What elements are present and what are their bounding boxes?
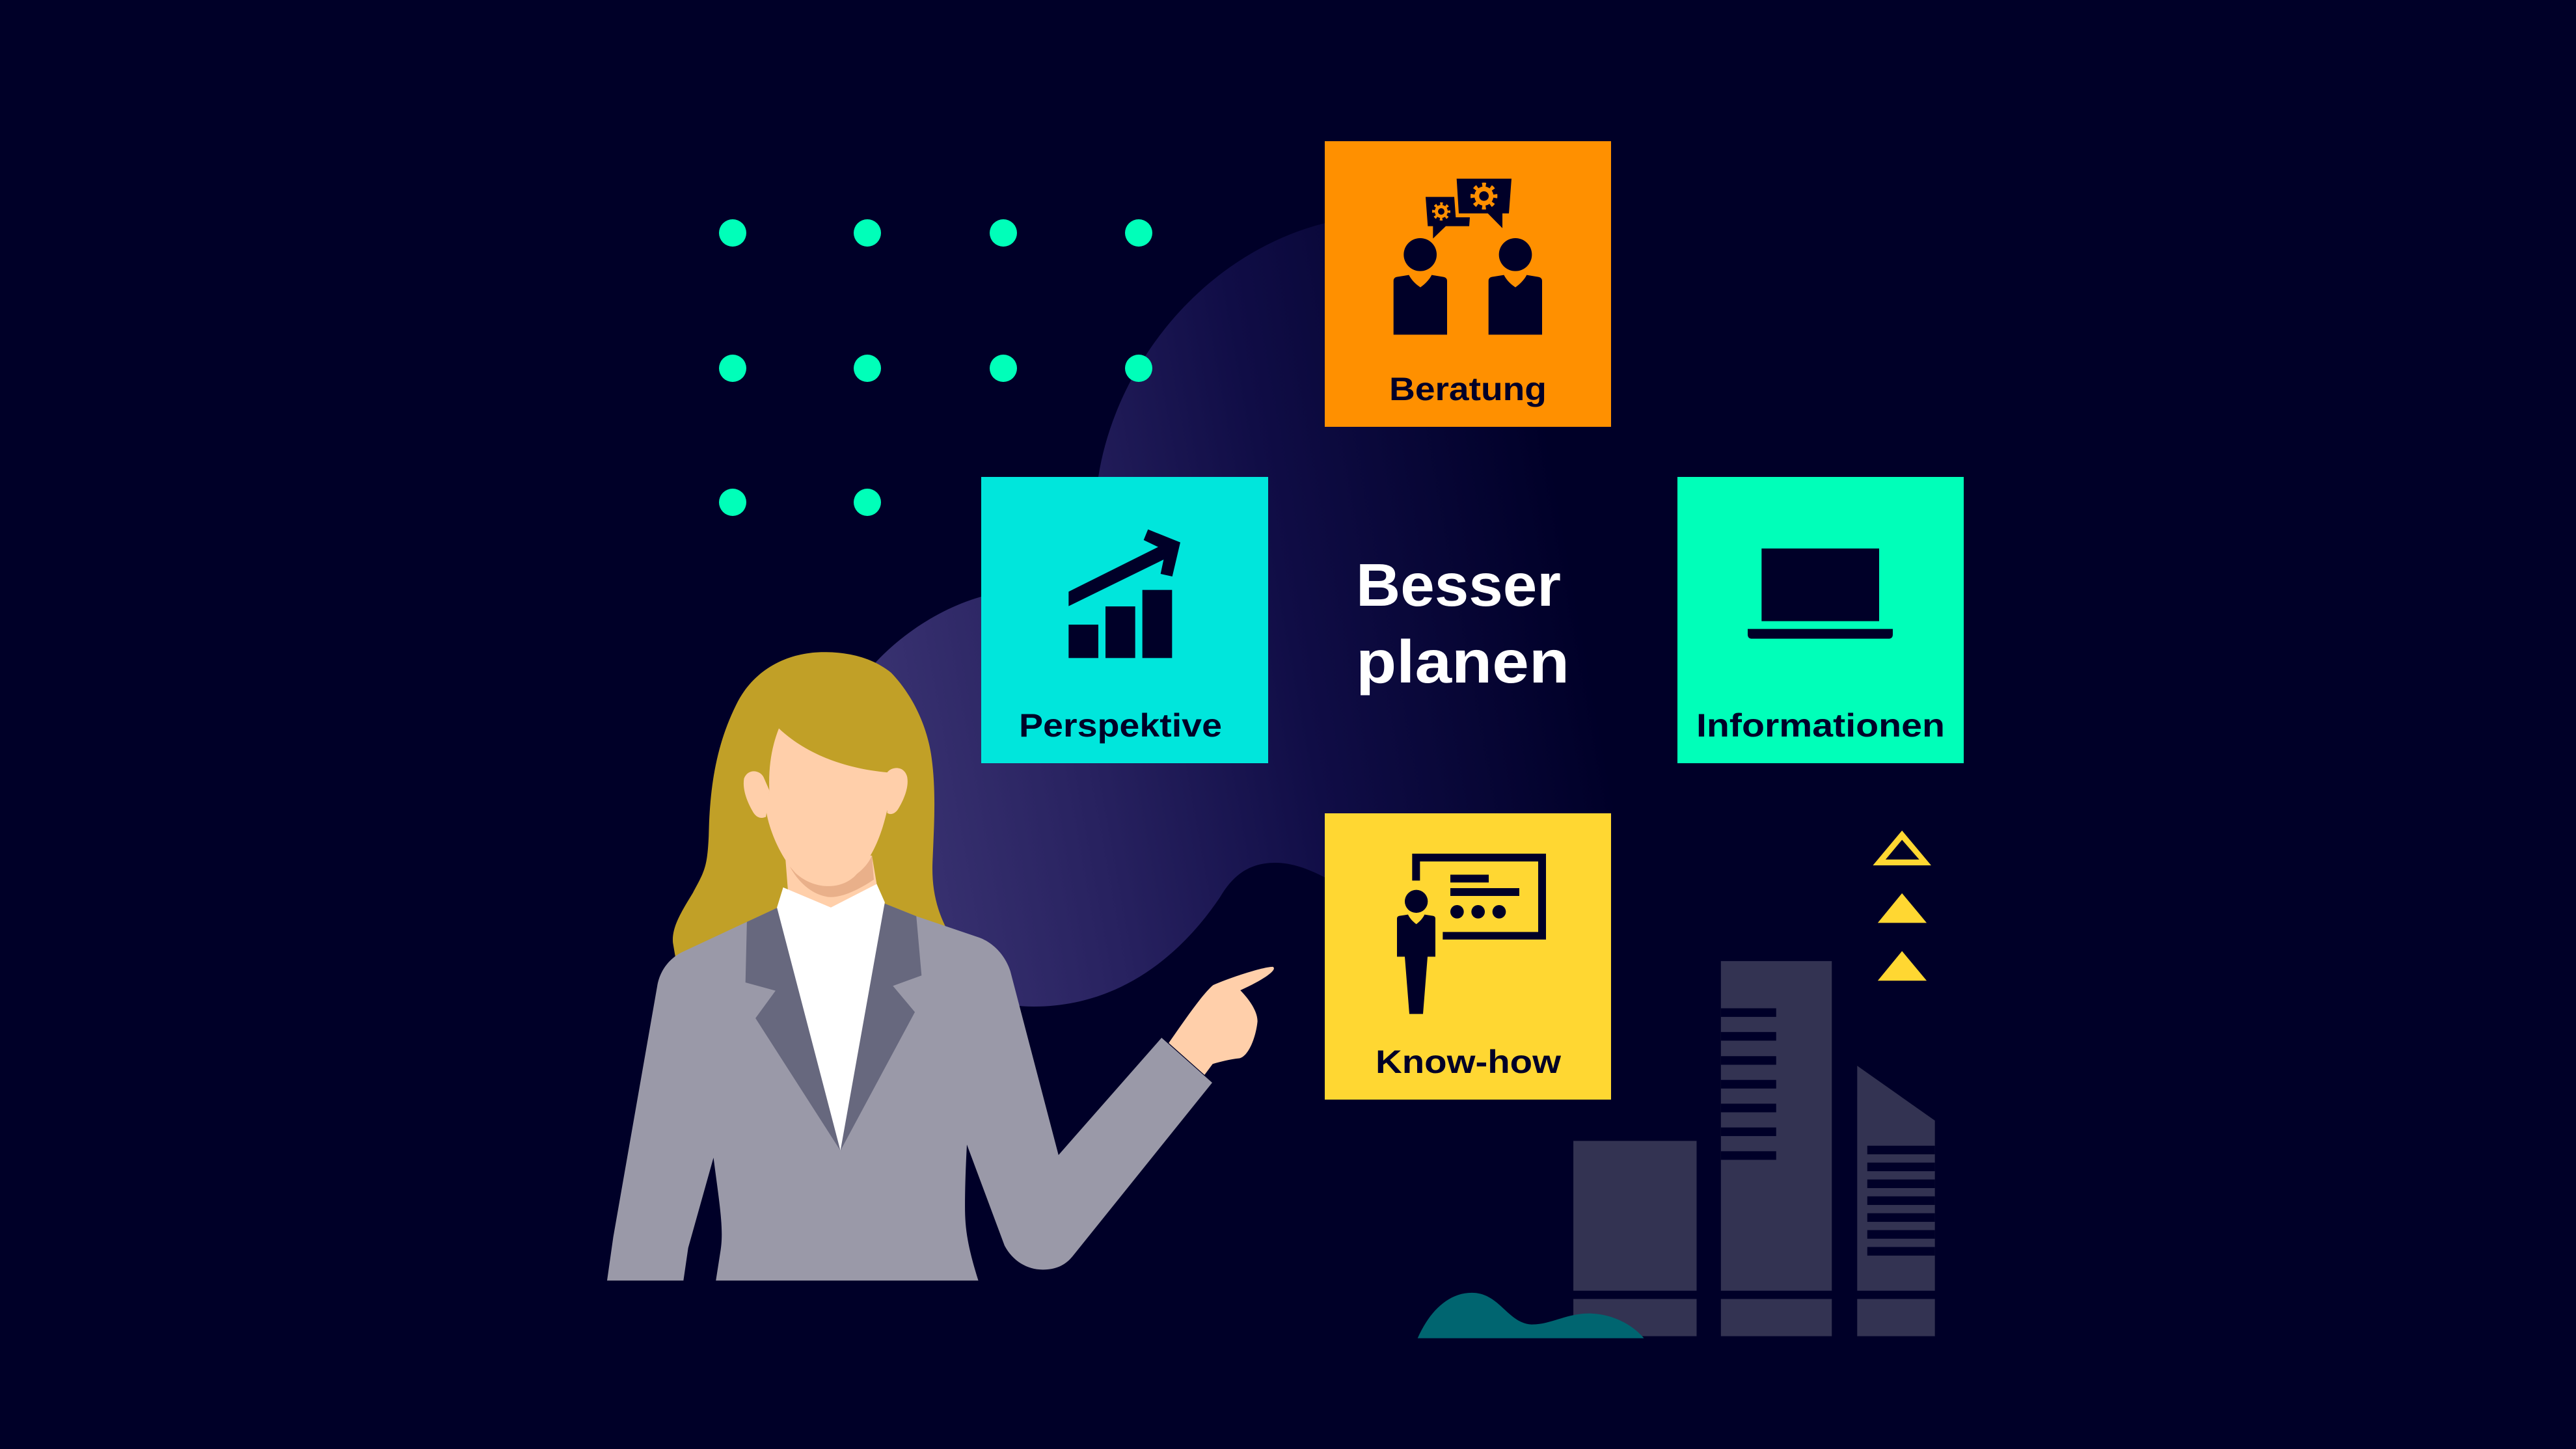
shirt [777, 884, 885, 1150]
neck shadow [790, 856, 874, 897]
panel: Informationen [1677, 477, 1964, 763]
label: Informationen: Informationen [1696, 707, 1945, 744]
teal mound [1418, 1293, 1644, 1338]
face and ears [744, 728, 908, 886]
title: Besser planen [1356, 551, 1569, 696]
dot grid [719, 219, 1152, 516]
label: Know-how: Know-how [1376, 1044, 1561, 1080]
icon: two people talking [1394, 179, 1542, 334]
title: Besser planen: Besser [1356, 551, 1561, 619]
icon: rising bar chart with arrow [1068, 530, 1180, 658]
label: Beratung: Beratung [1389, 371, 1547, 407]
building right [1857, 1066, 1935, 1336]
panel: Beratung [1325, 141, 1611, 427]
panel: Know-how [1325, 813, 1611, 1100]
yellow triangles [1873, 830, 1931, 981]
panel: Perspektive [981, 477, 1268, 763]
building left [1573, 1141, 1696, 1336]
lapels [746, 904, 921, 1150]
icon: presenter at board [1397, 854, 1546, 1014]
neck [785, 856, 876, 910]
label: Perspektive: Perspektive [1019, 707, 1222, 744]
hair [673, 652, 948, 962]
illustration: city buildings [1418, 830, 1935, 1338]
building middle [1721, 961, 1832, 1336]
title: Besser planen: planen [1356, 628, 1569, 696]
icon: laptop [1748, 548, 1893, 639]
illustration: businesswoman pointing [607, 652, 1274, 1280]
background blob [874, 216, 1627, 1007]
hand [1169, 967, 1274, 1075]
jacket [607, 904, 1212, 1280]
